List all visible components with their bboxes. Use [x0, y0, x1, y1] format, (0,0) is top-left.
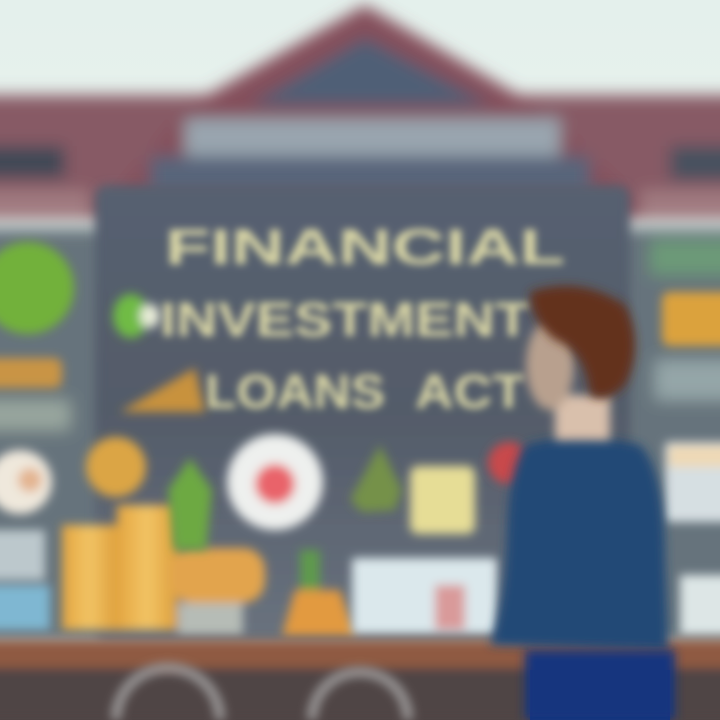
heading text: INVESTMENT: [160, 294, 530, 347]
heading text: [160, 219, 565, 419]
yellow note: [410, 466, 475, 534]
left green circle: [0, 242, 74, 334]
trousers base: [530, 670, 670, 720]
neck and face: [526, 320, 610, 440]
hair: [530, 286, 635, 398]
left icons in heading: [113, 294, 205, 412]
red dot: [488, 442, 530, 484]
central board: [95, 185, 630, 640]
gold bars: [62, 505, 265, 635]
heading text: ACT: [415, 366, 525, 419]
coin icon: [86, 437, 146, 497]
green arrow: [168, 458, 212, 550]
left white circle icon: [0, 450, 52, 630]
heading text: LOANS: [205, 366, 385, 419]
orange box with plant: [282, 550, 356, 636]
desk base: [0, 680, 720, 720]
desk circles: [116, 668, 408, 720]
jacket: [490, 438, 668, 650]
green chart icon: [350, 445, 402, 512]
trousers: [525, 650, 675, 720]
right orange label: [662, 292, 720, 346]
right panel cards: [665, 442, 720, 635]
left orange label: [0, 358, 62, 388]
side panels: [0, 228, 720, 643]
person: [490, 286, 675, 720]
building roof: [0, 5, 720, 220]
desk: [0, 640, 720, 720]
heading text: FINANCIAL: [165, 219, 565, 275]
target circle: [227, 434, 323, 530]
chart card: [352, 558, 497, 634]
